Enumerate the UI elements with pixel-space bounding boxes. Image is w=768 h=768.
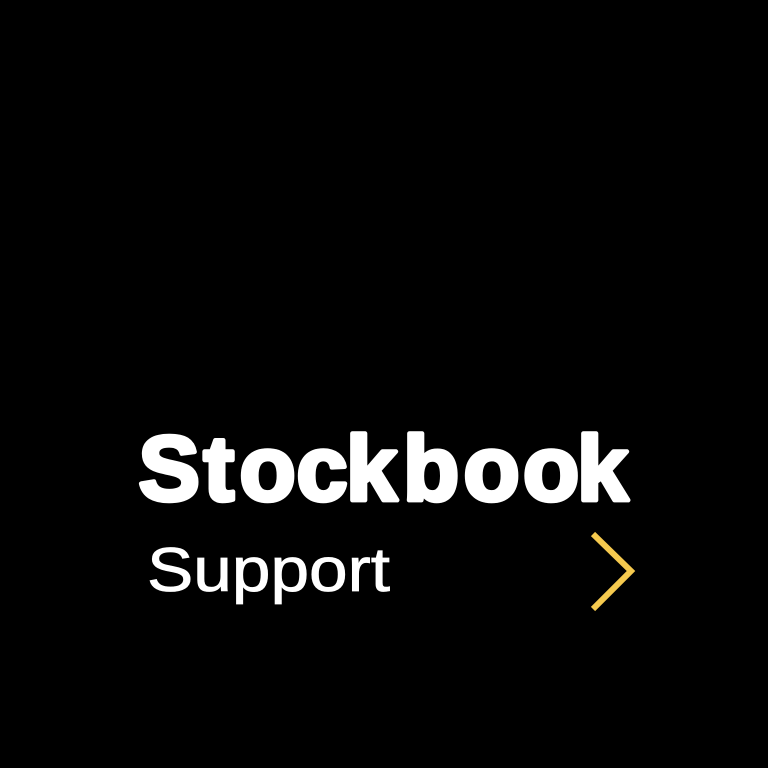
subtitle: Support: Support xyxy=(147,536,390,605)
title: Stockbook: Stockbook xyxy=(138,418,629,520)
icon: yellow chevron arrow xyxy=(593,534,631,609)
